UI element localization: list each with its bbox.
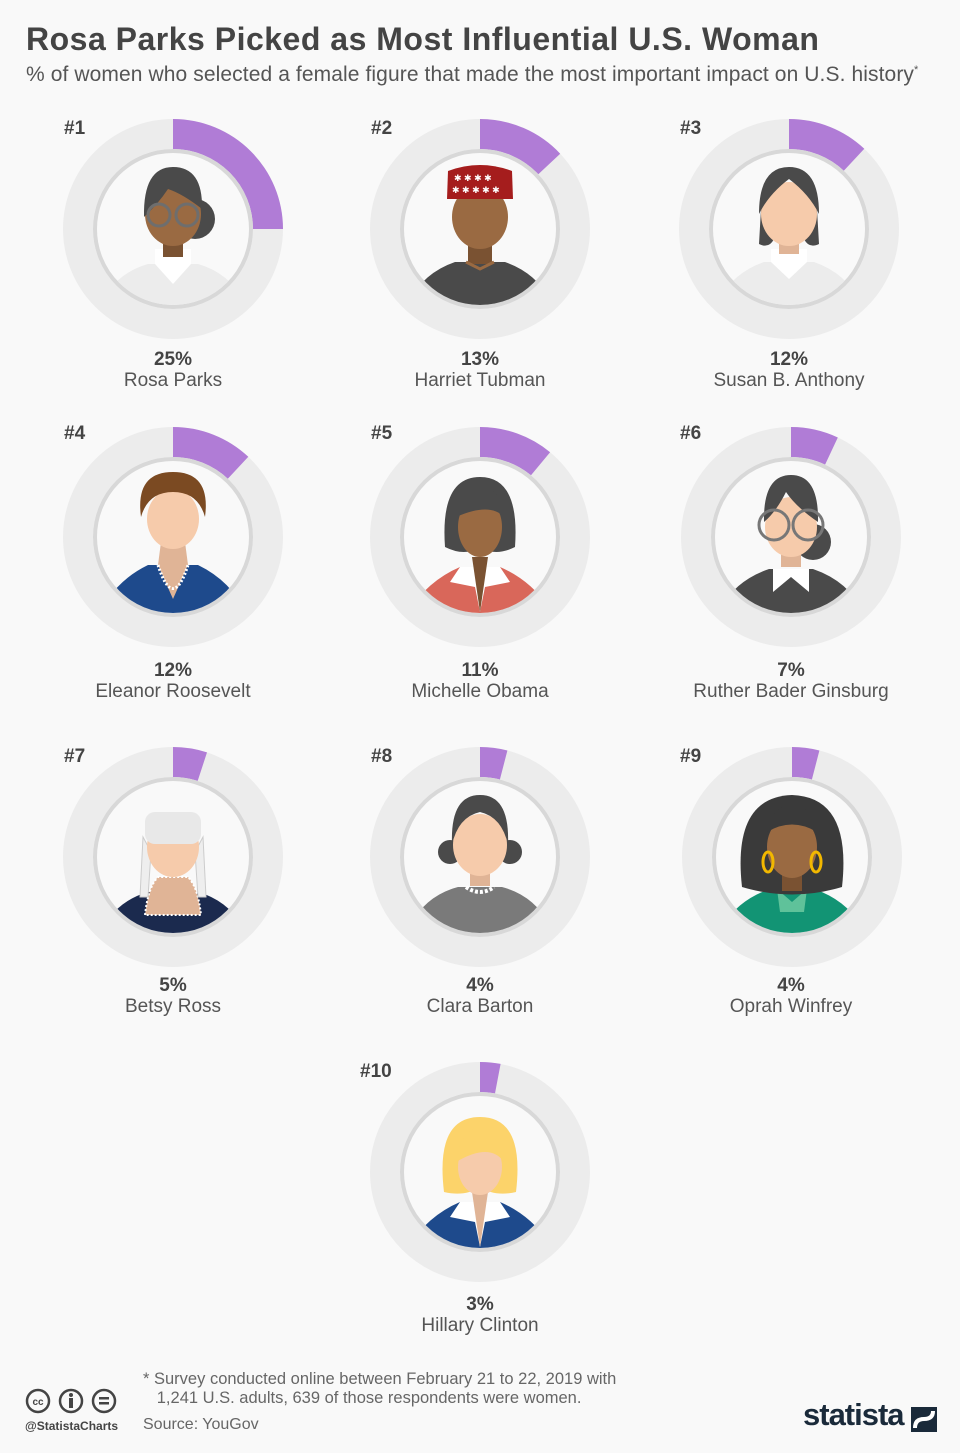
text: #5 bbox=[371, 423, 392, 444]
text: Betsy Ross bbox=[125, 996, 221, 1017]
value labels: Rosa Parks bbox=[124, 370, 222, 391]
footer: handle: @StatistaCharts bbox=[25, 1419, 118, 1433]
subtitle: % of women who selected a female figure that made the most important impact on U.S. history* bbox=[26, 63, 918, 86]
text: #4 bbox=[64, 423, 85, 444]
text: Clara Barton bbox=[427, 996, 533, 1017]
text: #3 bbox=[680, 118, 701, 139]
footer: note: * Survey conducted online between February 21 to 22, 2019 with bbox=[143, 1370, 616, 1388]
text: #7 bbox=[64, 746, 85, 767]
text: #8 bbox=[371, 746, 392, 767]
text: Michelle Obama bbox=[411, 681, 549, 702]
rank labels: #1 bbox=[64, 118, 85, 139]
donut: Hillary Clinton bbox=[385, 1062, 575, 1267]
donut: Oprah Winfrey bbox=[697, 747, 887, 952]
donut: Harriet Tubman: ✱ ✱ ✱ ✱ bbox=[454, 173, 492, 183]
donut: Susan B. Anthony bbox=[694, 119, 884, 324]
text: 5% bbox=[159, 975, 187, 996]
text: 4% bbox=[777, 975, 805, 996]
text: Eleanor Roosevelt bbox=[95, 681, 251, 702]
text: Ruther Bader Ginsburg bbox=[693, 681, 889, 702]
text: 4% bbox=[466, 975, 494, 996]
donut: Ruth Bader Ginsburg bbox=[696, 427, 886, 632]
text: Oprah Winfrey bbox=[730, 996, 852, 1017]
donut charts bbox=[63, 119, 902, 1282]
text: 3% bbox=[466, 1294, 494, 1315]
text: 11% bbox=[462, 660, 498, 681]
text: 13% bbox=[461, 349, 499, 370]
text: Susan B. Anthony bbox=[713, 370, 865, 391]
footer: note bbox=[143, 1370, 616, 1407]
donut: Clara Barton bbox=[385, 747, 575, 952]
footer: source: Source: YouGov bbox=[143, 1416, 259, 1433]
text: 12% bbox=[770, 349, 808, 370]
text: Hillary Clinton bbox=[421, 1315, 539, 1336]
donut: Michelle Obama bbox=[385, 427, 575, 632]
title: Rosa Parks Picked as Most Influential U.S. Woman bbox=[26, 21, 819, 57]
donut: Rosa Parks bbox=[78, 119, 283, 324]
logo: statista: statista bbox=[803, 1397, 904, 1432]
donut: Betsy Ross bbox=[78, 747, 268, 952]
text: #6 bbox=[680, 423, 701, 444]
donut: Harriet Tubman bbox=[385, 119, 575, 324]
text: #2 bbox=[371, 118, 392, 139]
value labels bbox=[124, 349, 222, 391]
text: #9 bbox=[680, 746, 701, 767]
footer: license icons bbox=[26, 1388, 116, 1414]
donut: Harriet Tubman: ✱ ✱ ✱ ✱ ✱ bbox=[452, 185, 500, 195]
footer: note: 1,241 U.S. adults, 639 of those respondents were women. bbox=[157, 1389, 581, 1407]
donut: Eleanor Roosevelt bbox=[78, 427, 268, 632]
text: Harriet Tubman bbox=[415, 370, 545, 391]
value labels: 25% bbox=[154, 349, 192, 370]
footer: license icons: cc bbox=[32, 1397, 44, 1408]
text: 7% bbox=[777, 660, 805, 681]
text: #10 bbox=[360, 1061, 392, 1082]
text: 12% bbox=[154, 660, 192, 681]
